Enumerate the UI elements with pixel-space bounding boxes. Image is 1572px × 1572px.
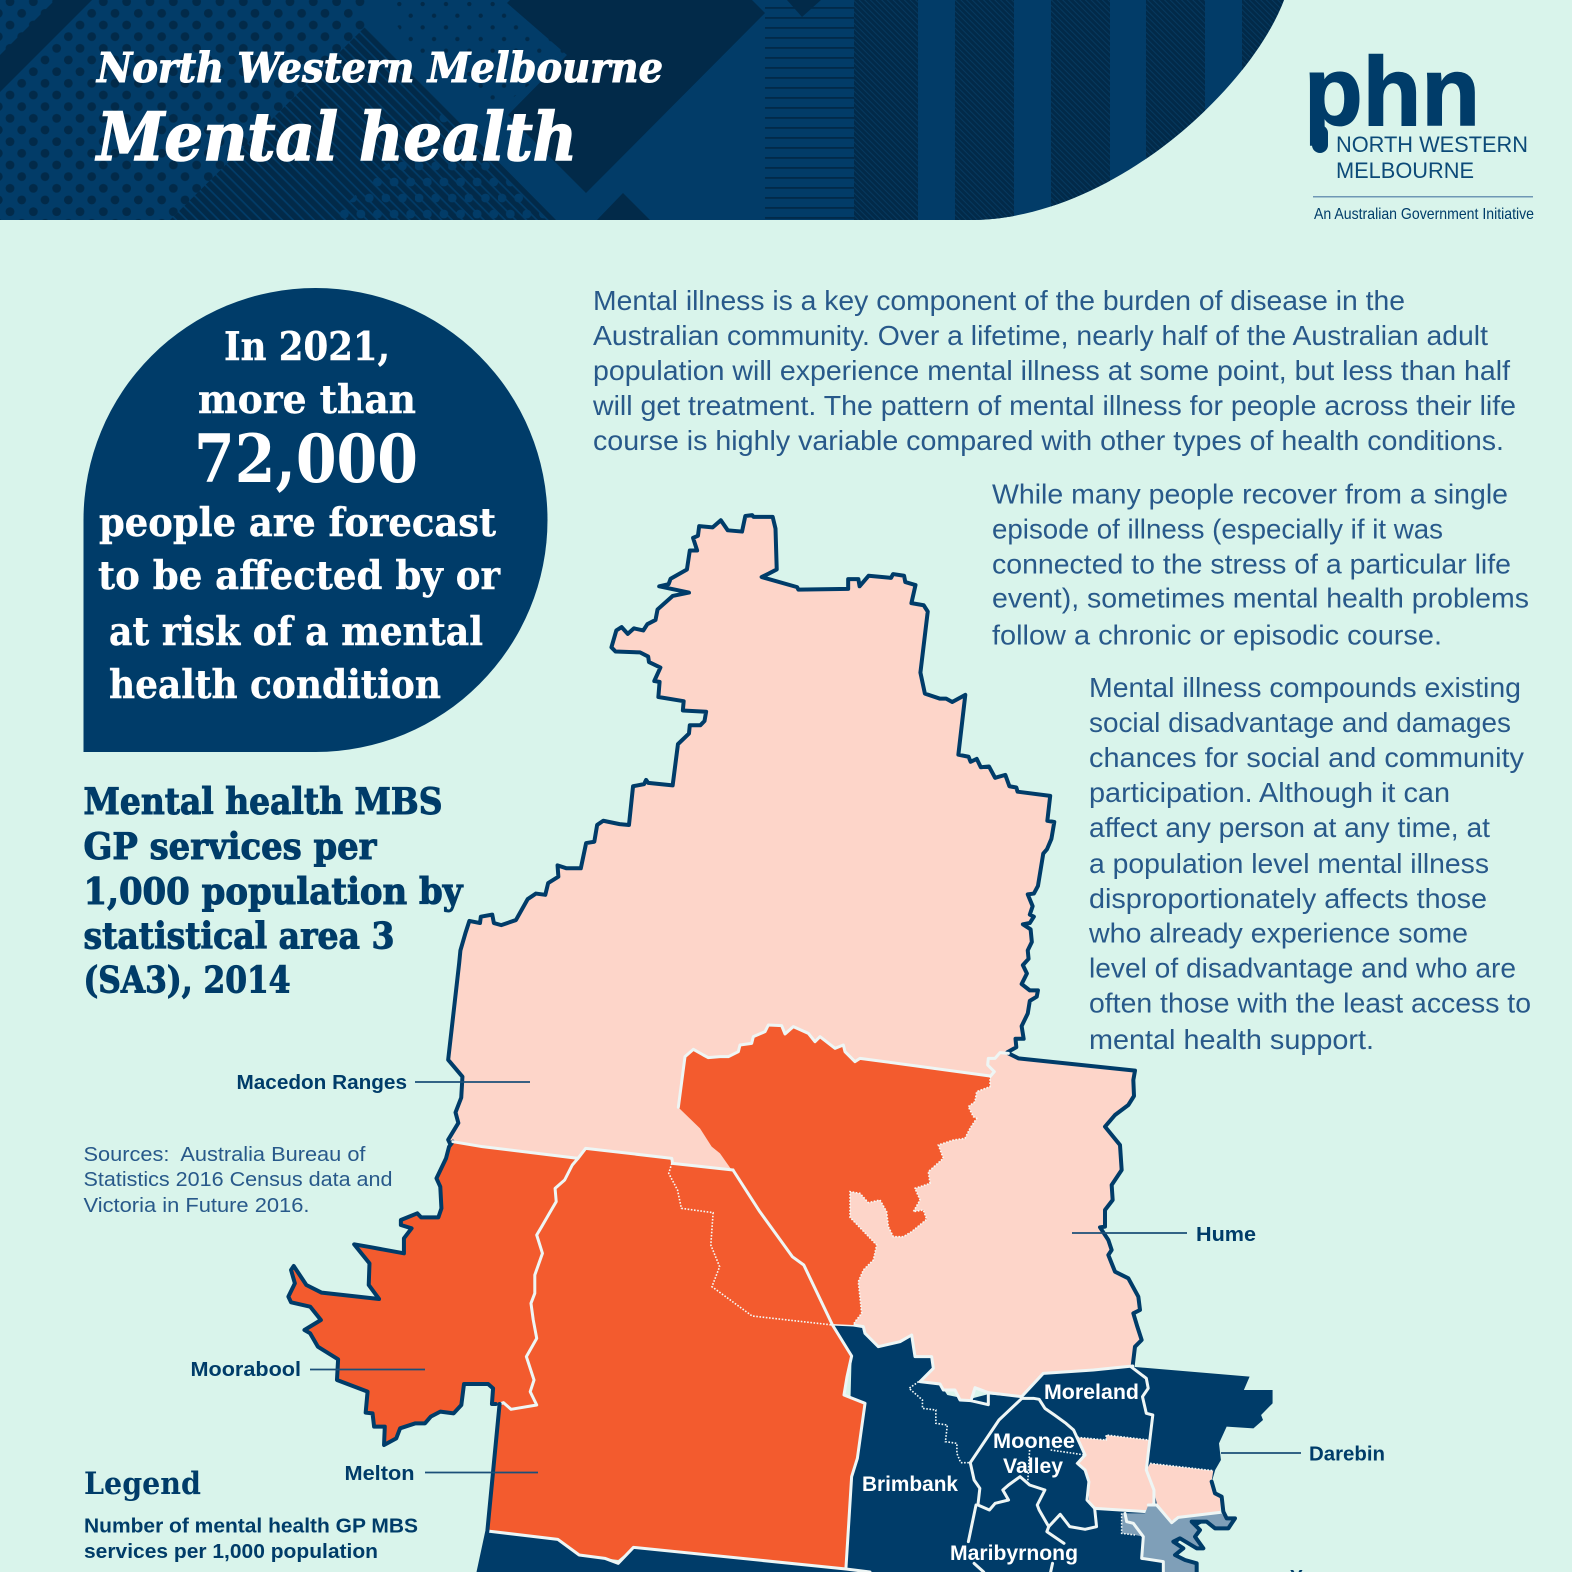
- title: North Western Melbourne: [95, 44, 663, 92]
- text block: sources: Sources: Australia Bureau of: [84, 1144, 366, 1166]
- region: Sunbury area of Hume: [678, 1025, 990, 1325]
- logo: phn North Western Melbourne: NORTH WESTERN: [1336, 132, 1528, 157]
- text block: disadvantage paragraph: participation. Although it can: [1089, 777, 1450, 808]
- text block: sources: Statistics 2016 Census data and: [84, 1169, 392, 1191]
- text block: recovery paragraph: [992, 478, 1529, 650]
- leader label: Macedon Ranges: Macedon Ranges: [236, 1071, 407, 1094]
- text block: disadvantage paragraph: affect any person at any time, at: [1089, 812, 1490, 843]
- legend heading and caption: [84, 1466, 418, 1563]
- text block: disadvantage paragraph: disproportionately affects those: [1089, 883, 1487, 914]
- header banner: [0, 0, 1300, 222]
- map region labels: Brimbank: [862, 1472, 958, 1496]
- text block: disadvantage paragraph: mental health support.: [1089, 1024, 1374, 1055]
- text block: intro paragraph: Australian community. Over a lifetime, nearly half of the Australian adult: [593, 320, 1488, 351]
- leader label: Darebin: Darebin: [1309, 1442, 1385, 1466]
- text block: disadvantage paragraph: chances for social and community: [1089, 742, 1524, 773]
- title: [95, 44, 663, 176]
- logo: phn North Western Melbourne: MELBOURNE: [1336, 158, 1474, 183]
- leader label: Melton: Melton: [344, 1462, 414, 1485]
- text block: sources: [84, 1144, 392, 1217]
- region: Moorabool: [288, 1142, 578, 1445]
- heading: map title: Mental health MBS: [84, 781, 442, 823]
- logo: phn North Western Melbourne: An Australian Government Initiative: [1314, 206, 1534, 223]
- text block: disadvantage paragraph: social disadvantage and damages: [1089, 707, 1511, 738]
- map region labels: Valley: [1003, 1454, 1063, 1478]
- callout: forecast people affected: health condition: [109, 662, 441, 708]
- text block: intro paragraph: will get treatment. The pattern of mental illness for people across their life: [592, 390, 1516, 421]
- text block: disadvantage paragraph: Mental illness compounds existing: [1089, 672, 1521, 703]
- callout: forecast people affected: In 2021,: [224, 324, 390, 370]
- legend heading and caption: services per 1,000 population: [84, 1540, 378, 1563]
- text block: disadvantage paragraph: level of disadvantage and who are: [1089, 952, 1516, 984]
- leader label: Hume: Hume: [1196, 1223, 1256, 1246]
- leader label: Moorabool: Moorabool: [190, 1358, 301, 1381]
- region: inner-west navy areas: [479, 1325, 1273, 1572]
- text block: intro paragraph: course is highly variable compared with other types of health conditions.: [593, 425, 1504, 456]
- region: Melton: [453, 1142, 870, 1572]
- text block: recovery paragraph: While many people recover from a single: [992, 478, 1508, 510]
- callout: forecast people affected: to be affected by or: [98, 553, 500, 599]
- title: Mental health: [95, 98, 577, 176]
- region: Macedon Ranges: [448, 515, 1054, 1176]
- region: Yarra: [1122, 1482, 1235, 1572]
- text block: recovery paragraph: episode of illness (especially if it was: [992, 514, 1443, 544]
- text block: sources: Victoria in Future 2016.: [84, 1195, 310, 1217]
- callout: forecast people affected: 72,000: [194, 420, 418, 498]
- map region labels: Maribyrnong: [950, 1541, 1078, 1565]
- text block: intro paragraph: population will experience mental illness at some point, but less than half: [593, 355, 1510, 386]
- legend heading and caption: Number of mental health GP MBS: [84, 1514, 418, 1538]
- legend heading and caption: Legend: [84, 1466, 201, 1502]
- text block: recovery paragraph: follow a chronic or episodic course.: [992, 620, 1442, 650]
- callout: forecast people affected: [84, 288, 548, 752]
- region: inner northern pale areas and boundaries: [909, 1367, 1221, 1572]
- heading: map title: statistical area 3: [84, 916, 394, 958]
- text block: intro paragraph: [592, 285, 1516, 456]
- text block: recovery paragraph: event), sometimes mental health problems: [992, 582, 1529, 614]
- choropleth map of SA3 regions: [288, 515, 1273, 1572]
- heading: map title: 1,000 population by: [84, 871, 464, 913]
- logo: phn North Western Melbourne: phn: [1304, 37, 1480, 146]
- map region labels: Moonee: [993, 1429, 1075, 1453]
- heading: map title: GP services per: [84, 826, 377, 868]
- text block: disadvantage paragraph: a population level mental illness: [1089, 848, 1489, 879]
- heading: map title: [84, 781, 464, 1002]
- map region labels: [862, 1380, 1139, 1565]
- text block: intro paragraph: Mental illness is a key component of the burden of disease in the: [593, 285, 1405, 316]
- logo: phn North Western Melbourne: [1304, 37, 1534, 223]
- callout: forecast people affected: people are forecast: [99, 500, 496, 546]
- callout: forecast people affected: more than: [198, 377, 416, 423]
- callout: forecast people affected: at risk of a mental: [109, 609, 483, 655]
- text block: disadvantage paragraph: [1088, 672, 1531, 1055]
- region: Hume: [832, 1053, 1142, 1405]
- text block: recovery paragraph: connected to the stress of a particular life: [992, 548, 1511, 580]
- heading: map title: (SA3), 2014: [84, 960, 290, 1002]
- map region labels: Moreland: [1044, 1380, 1139, 1404]
- text block: disadvantage paragraph: who already experience some: [1088, 918, 1468, 948]
- text block: disadvantage paragraph: often those with the least access to: [1089, 988, 1531, 1018]
